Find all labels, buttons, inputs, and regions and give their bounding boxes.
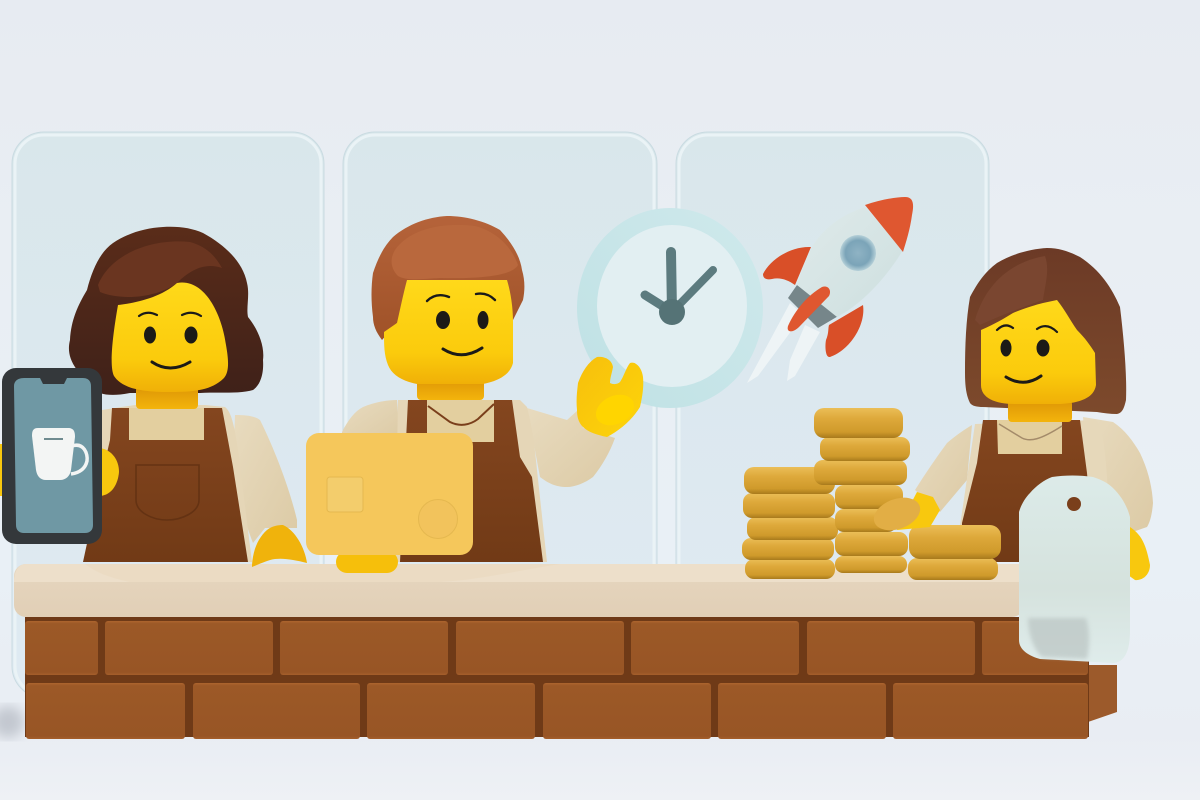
card dial — [418, 500, 458, 538]
held coin — [869, 492, 925, 536]
pocket — [136, 465, 199, 520]
rocket body — [797, 207, 903, 317]
neck — [1008, 400, 1072, 422]
price tag — [1019, 476, 1130, 663]
smile — [152, 362, 190, 368]
counter top — [14, 564, 1024, 617]
panel: middle glass — [343, 132, 657, 632]
clock face — [597, 225, 747, 387]
brick wall — [25, 617, 1117, 739]
face — [384, 280, 513, 384]
eyes — [436, 311, 450, 329]
eyebrows — [427, 294, 495, 301]
rocket left fin — [763, 247, 811, 285]
rocket nose — [865, 197, 913, 252]
clock hands — [645, 252, 713, 312]
smile — [1006, 376, 1041, 382]
phone — [2, 368, 102, 544]
torso — [955, 420, 1110, 560]
floor shadow — [0, 706, 24, 738]
palm highlight — [591, 389, 639, 431]
rocket flames — [747, 303, 803, 383]
left sleeve — [915, 425, 972, 512]
card — [306, 433, 473, 555]
right sleeve — [527, 408, 615, 487]
eyes — [144, 326, 156, 344]
panel: left glass rim — [15, 135, 321, 695]
figure: man with card — [342, 216, 615, 562]
counter top surface — [14, 564, 1024, 582]
eyebrows — [139, 313, 201, 316]
thumb under card — [336, 551, 398, 573]
rocket window — [840, 235, 876, 271]
tag textured band — [1028, 618, 1089, 659]
hand left edge — [0, 444, 4, 496]
coins: tall stack — [814, 408, 910, 573]
counter surface shadow — [85, 564, 560, 582]
wall side — [1088, 665, 1117, 722]
hair highlight — [975, 256, 1047, 325]
smile — [443, 348, 482, 355]
neckline — [428, 404, 494, 425]
torso — [84, 405, 252, 562]
clock — [577, 208, 763, 408]
face — [112, 283, 228, 392]
panel: middle glass rim — [346, 135, 654, 625]
panel: left glass — [12, 132, 324, 698]
coffee mug — [32, 428, 87, 480]
collar — [997, 420, 1062, 454]
panel: right glass rim — [679, 135, 986, 625]
apron — [400, 400, 543, 562]
hand on counter — [252, 525, 307, 567]
panel: right glass — [676, 132, 989, 632]
waving hand — [577, 357, 643, 437]
right sleeve — [1083, 417, 1153, 533]
apron — [83, 408, 248, 562]
card chip — [327, 477, 363, 512]
coins: short stack — [908, 525, 1001, 580]
figure: woman with phone — [0, 227, 297, 562]
hand behind tag — [1128, 527, 1150, 580]
hair highlight — [98, 241, 222, 297]
face — [981, 300, 1096, 404]
neck — [417, 378, 484, 400]
apron — [962, 420, 1095, 562]
hair — [965, 248, 1126, 414]
bricks: upper row — [25, 621, 1088, 675]
tag hole — [1067, 497, 1081, 511]
rocket band — [788, 285, 840, 328]
mortar — [25, 617, 1089, 737]
collar — [129, 408, 204, 440]
hair — [372, 216, 524, 340]
hair — [69, 227, 263, 395]
rocket centre fin — [788, 287, 830, 331]
neckline — [999, 424, 1062, 440]
neck — [136, 386, 198, 409]
rocket — [747, 197, 913, 383]
figure: woman with tag — [915, 248, 1153, 562]
hair quiff — [392, 225, 518, 279]
rocket right fin — [825, 305, 863, 357]
hand behind phone — [100, 448, 119, 496]
left sleeve — [342, 400, 400, 440]
sleeve — [233, 415, 297, 543]
clock hub — [659, 299, 685, 325]
collar — [427, 400, 494, 442]
phone screen — [14, 378, 93, 533]
torso — [395, 400, 547, 562]
eyes — [1000, 340, 1012, 356]
bricks: lower row — [26, 683, 1088, 739]
hand holding coin — [869, 492, 940, 536]
coins: left stack — [742, 467, 838, 579]
eyebrows — [997, 325, 1057, 332]
